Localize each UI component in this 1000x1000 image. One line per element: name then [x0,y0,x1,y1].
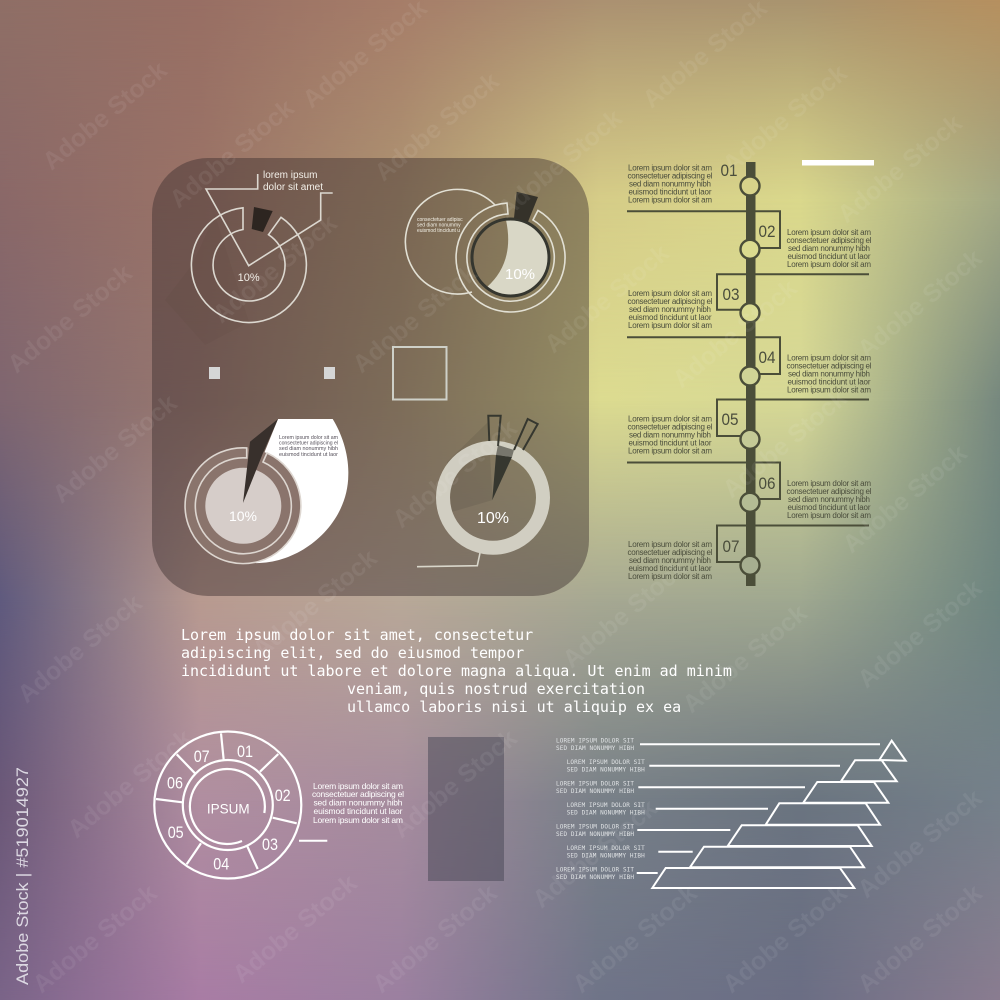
ring chart tick line [299,840,327,842]
timeline text blocks: consectetuer adipiscing el [628,297,713,306]
timeline text blocks: consectetuer adipiscing el [628,172,713,180]
watermarks: Adobe Stock [677,599,812,719]
chart: disc with white speech shape: euismod tincidunt ut laor [279,452,338,458]
chart: segmented ring 01-07: 02 [275,786,291,805]
chart: disc with white speech shape: consectetuer adipiscing el [279,441,338,447]
timeline numbers: 01 [720,161,738,180]
chart: dark ring with crescent and side circle: euismod tincidunt u [417,228,460,234]
chart: dark ring with crescent and side circle: sed diam nonummy [417,222,461,228]
ring chart text: Lorem ipsum dolor sit am [313,781,403,791]
watermarks: Adobe Stock [852,879,987,999]
chart: ring with pointer callout: dolor sit amet [263,182,323,193]
chart: segmented ring 01-07: 06 [167,774,183,792]
timeline text blocks: Lorem ipsum dolor sit am [628,540,712,549]
pyramid labels: SED DIAM NONUMMY HIBH [567,810,645,816]
chart: disc with white speech shape [185,419,348,564]
watermarks: Adobe Stock [539,239,674,359]
timeline text blocks: consectetuer adipiscing el [786,487,872,496]
timeline text blocks: consectetuer adipiscing el [786,362,872,370]
timeline text blocks: Lorem ipsum dolor sit am [628,196,712,204]
timeline text blocks: sed diam nonummy hibh [629,430,711,440]
ring chart text: Lorem ipsum dolor sit am [313,815,403,825]
central paragraph: Lorem ipsum dolor sit amet, consectetur [181,626,533,644]
chart: dark ring with crescent and side circle: 10% [505,266,535,283]
watermarks: Adobe Stock [367,879,502,999]
timeline text blocks: sed diam nonummy hibh [788,495,870,504]
watermarks: Adobe Stock [837,439,972,559]
timeline text blocks: sed diam nonummy hibh [788,370,870,378]
watermarks: Adobe Stock [387,414,522,534]
timeline numbers: 03 [722,285,740,304]
pyramid labels [556,738,645,881]
central paragraph: incididunt ut labore et dolore magna aliqua. Ut enim ad minim [181,662,732,680]
watermarks: Adobe Stock [557,554,692,674]
watermarks: Adobe Stock [62,724,197,844]
ring chart text: consectetuer adipiscing el [312,789,404,799]
ring chart text: sed diam nonummy hibh [314,798,403,808]
small square right [324,367,335,379]
timeline text blocks [628,164,872,581]
pyramid labels: SED DIAM NONUMMY HIBH [556,745,634,752]
watermarks: Adobe Stock [369,67,504,187]
timeline text blocks: Lorem ipsum dolor sit am [787,386,871,394]
timeline text blocks: sed diam nonummy hibh [629,556,711,565]
chart: segmented ring 01-07: 01 [237,742,253,761]
ring chart text: euismod tincidunt ut laor [314,806,403,816]
timeline text blocks: Lorem ipsum dolor sit am [787,479,871,488]
watermarks: Adobe Stock [387,724,522,844]
timeline numbers: 02 [758,222,776,241]
timeline text blocks: euismod tincidunt ut laor [788,503,871,512]
watermarks: Adobe Stock [347,259,482,379]
watermarks: Adobe Stock [852,574,987,694]
timeline numbers: 04 [758,348,776,367]
watermarks: Adobe Stock [47,389,182,509]
watermarks: Adobe Stock [492,104,627,224]
timeline text blocks: Lorem ipsum dolor sit am [787,354,871,362]
timeline text blocks: Lorem ipsum dolor sit am [787,228,871,237]
pyramid labels: SED DIAM NONUMMY HIBH [556,874,634,881]
watermarks: Adobe Stock [852,244,987,364]
outlined square [393,347,446,400]
timeline text blocks: Lorem ipsum dolor sit am [628,446,712,456]
central paragraph: ullamco laboris nisi ut aliquip ex ea [347,698,681,716]
chart: disc with white speech shape: Lorem ipsum dolor sit am [279,435,338,441]
watermarks: Adobe Stock [717,59,852,179]
chart: ring with pointer callout: 10% [238,272,260,284]
chart: disc with white speech shape: 10% [229,508,257,524]
timeline spine [746,162,756,586]
timeline text blocks: euismod tincidunt ut laor [628,438,712,448]
panel: rounded dark chart panel [152,158,589,596]
chart: segmented ring 01-07: 04 [213,854,229,874]
watermarks: Adobe Stock [12,589,147,709]
timeline text blocks: euismod tincidunt ut laor [628,564,712,573]
watermarks: Adobe Stock [247,544,382,664]
central paragraph [181,626,732,716]
chart: stepped pyramid with labels [556,738,906,888]
watermarks: Adobe Stock [207,209,342,329]
chart: dark ring with crescent and side circle: consectetuer adipisc [417,217,463,223]
watermarks: Adobe Stock [2,259,137,379]
timeline text blocks: Lorem ipsum dolor sit am [787,511,871,520]
chart: segmented ring 01-07: 05 [168,823,184,842]
pyramid steps [652,741,906,888]
chart: segmented ring 01-07: 03 [262,835,278,854]
chart: light ring with needle: 10% [477,510,509,527]
chart: ring with pointer callout [165,170,333,345]
pyramid labels: LOREM IPSUM DOLOR SIT [567,802,645,809]
timeline text blocks: Lorem ipsum dolor sit am [628,164,712,172]
chart: disc with white speech shape: sed diam nonummy hibh [279,446,338,452]
timeline numbers: 06 [758,474,776,493]
pyramid labels: SED DIAM NONUMMY HIBH [556,831,634,838]
timeline text blocks: Lorem ipsum dolor sit am [628,414,712,424]
pyramid leader lines [637,744,880,873]
small square left [209,367,220,379]
timeline text blocks: consectetuer adipiscing el [628,422,713,432]
pyramid labels: LOREM IPSUM DOLOR SIT [556,824,634,830]
watermarks: Adobe Stock [832,109,967,229]
timeline text blocks: sed diam nonummy hibh [629,180,711,188]
pyramid labels: LOREM IPSUM DOLOR SIT [556,866,634,874]
pyramid labels: LOREM IPSUM DOLOR SIT [567,759,645,766]
watermarks: Adobe Stock [852,784,987,904]
watermarks: Adobe Stock [667,274,802,394]
timeline text blocks: euismod tincidunt ut laor [628,313,712,322]
grey vertical block [428,737,504,881]
timeline numbers: 05 [722,410,738,429]
timeline text blocks: Lorem ipsum dolor sit am [628,321,712,330]
pyramid labels: LOREM IPSUM DOLOR SIT [556,738,634,744]
pyramid labels: SED DIAM NONUMMY HIBH [567,766,645,774]
watermarks: Adobe Stock [227,869,362,989]
timeline connectors [627,211,869,562]
timeline text blocks: consectetuer adipiscing el [786,236,872,245]
white accent bar [802,160,874,166]
timeline text blocks: Lorem ipsum dolor sit am [628,289,712,298]
timeline text blocks: Lorem ipsum dolor sit am [787,260,871,269]
watermarks: Adobe Stock [164,94,299,214]
watermarks: Adobe Stock [27,879,162,999]
timeline numbers: 07 [722,537,740,556]
chart: dark ring with crescent and side circle [405,189,565,312]
timeline text blocks: Lorem ipsum dolor sit am [628,572,712,581]
chart: ring with pointer callout: lorem ipsum [263,170,317,181]
timeline [627,161,872,586]
timeline text blocks: euismod tincidunt ut laor [788,252,871,261]
central paragraph: veniam, quis nostrud exercitation [347,680,645,698]
pyramid labels: SED DIAM NONUMMY HIBH [556,788,634,795]
timeline text blocks: sed diam nonummy hibh [629,305,711,314]
watermarks: Adobe Stock [717,384,852,504]
watermarks: Adobe Stock [567,879,702,999]
pyramid labels: SED DIAM NONUMMY HIBH [567,852,645,860]
timeline numbers [720,161,776,556]
pyramid labels: LOREM IPSUM DOLOR SIT [556,780,634,788]
timeline nodes [740,176,760,575]
chart: segmented ring 01-07: 07 [194,747,210,766]
chart: light ring with needle [417,416,543,567]
ring chart text [312,781,404,825]
watermarks: Adobe Stock [37,56,172,176]
chart: segmented ring 01-07: IPSUM [207,802,250,816]
timeline text blocks: euismod tincidunt ut laor [788,378,871,386]
watermarks: Adobe Stock [527,794,662,914]
timeline text blocks: euismod tincidunt ut laor [628,188,712,196]
central paragraph: adipiscing elit, sed do eiusmod tempor [181,644,524,662]
watermarks: Adobe Stock [717,879,852,999]
chart: segmented ring 01-07 [154,732,301,878]
pyramid labels: LOREM IPSUM DOLOR SIT [567,845,645,852]
timeline text blocks: consectetuer adipiscing el [628,548,713,557]
timeline text blocks: sed diam nonummy hibh [788,244,870,253]
stock id side text: Adobe Stock | #519014927 [14,767,32,985]
